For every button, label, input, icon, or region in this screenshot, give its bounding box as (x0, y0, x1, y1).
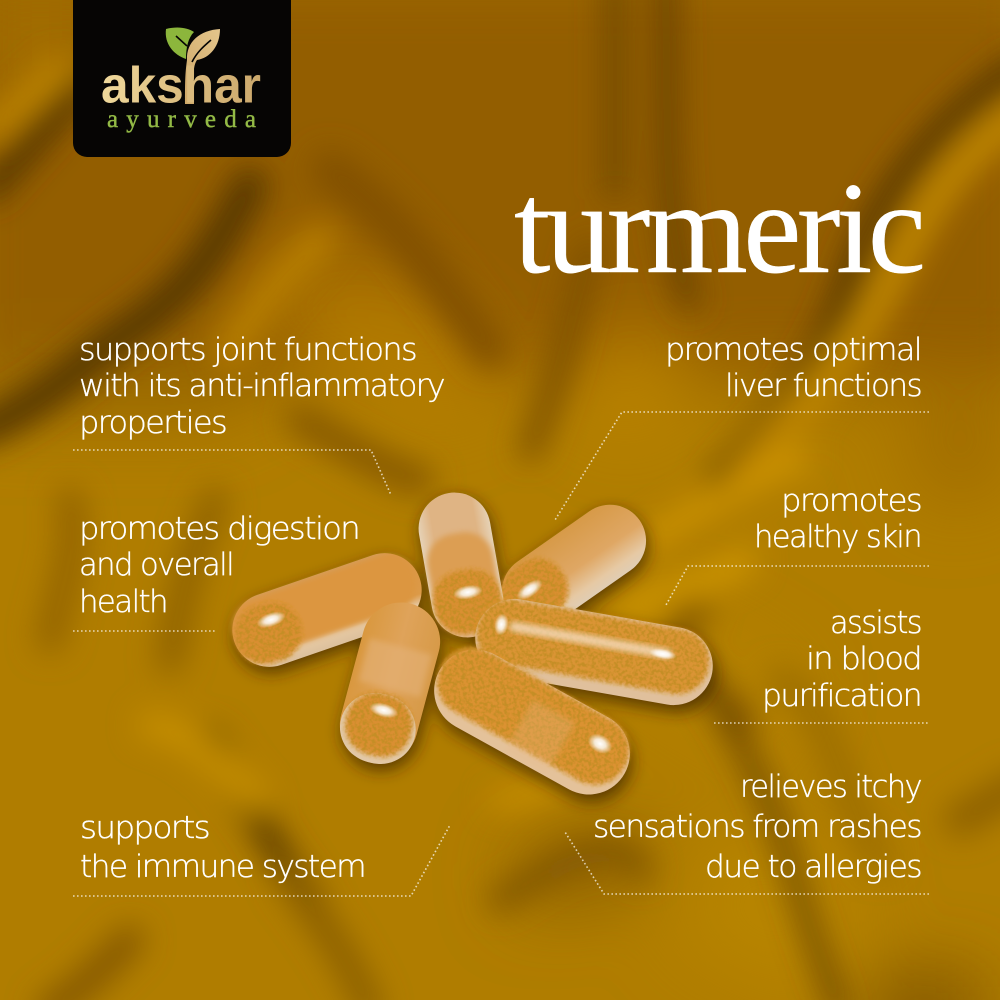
logo tagline: ayurveda (107, 106, 256, 133)
connector: liver functions (555, 412, 929, 520)
text: itchy sensations: relieves itchy (740, 769, 921, 805)
capsule: top centre (413, 487, 509, 643)
text: itchy sensations: sensations from rashes (593, 809, 921, 845)
title: turmeric (514, 156, 926, 301)
text: itchy sensations: due to allergies (705, 849, 921, 885)
capsule: upper right (488, 491, 660, 641)
capsule shadows (224, 492, 721, 816)
text: blood purification: assists (830, 605, 921, 641)
text: joint functions: properties (79, 405, 226, 441)
connector: blood purification (714, 722, 929, 724)
text: blood purification: in blood (806, 641, 921, 677)
text: digestion: promotes digestion (79, 511, 359, 547)
text: itchy sensations (593, 769, 921, 885)
text: immune system (80, 810, 365, 885)
text: healthy skin (754, 483, 921, 555)
text: healthy skin: healthy skin (754, 519, 921, 555)
capsule: left (222, 543, 432, 677)
capsule: right long (469, 593, 719, 711)
text: joint functions: supports joint functions (79, 332, 416, 368)
text: liver functions: promotes optimal (665, 332, 921, 368)
text: immune system: supports (80, 810, 209, 846)
text: blood purification: purification (762, 678, 921, 714)
text: digestion: and overall (79, 547, 233, 583)
capsule: front (419, 635, 645, 809)
text: liver functions (665, 332, 921, 404)
text: joint functions: with its anti-inflammatory (79, 368, 444, 404)
connector lines (73, 412, 929, 896)
connector: immune system (73, 825, 450, 896)
logo panel (73, 0, 291, 157)
capsules (222, 487, 721, 816)
text: joint functions (79, 332, 444, 441)
text: digestion: health (79, 584, 167, 620)
text: digestion (79, 511, 359, 620)
connector: healthy skin (666, 566, 929, 605)
capsule: lower left (331, 594, 449, 772)
connector: digestion (73, 630, 215, 632)
text: healthy skin: promotes (781, 483, 921, 519)
text: immune system: the immune system (80, 849, 365, 885)
connector: itchy sensations (565, 832, 929, 894)
text: blood purification (762, 605, 921, 714)
logo wordmark: akshar (101, 56, 261, 114)
connector: joint functions (73, 450, 391, 495)
icon: leaves (166, 28, 220, 104)
text: liver functions: liver functions (725, 368, 921, 404)
